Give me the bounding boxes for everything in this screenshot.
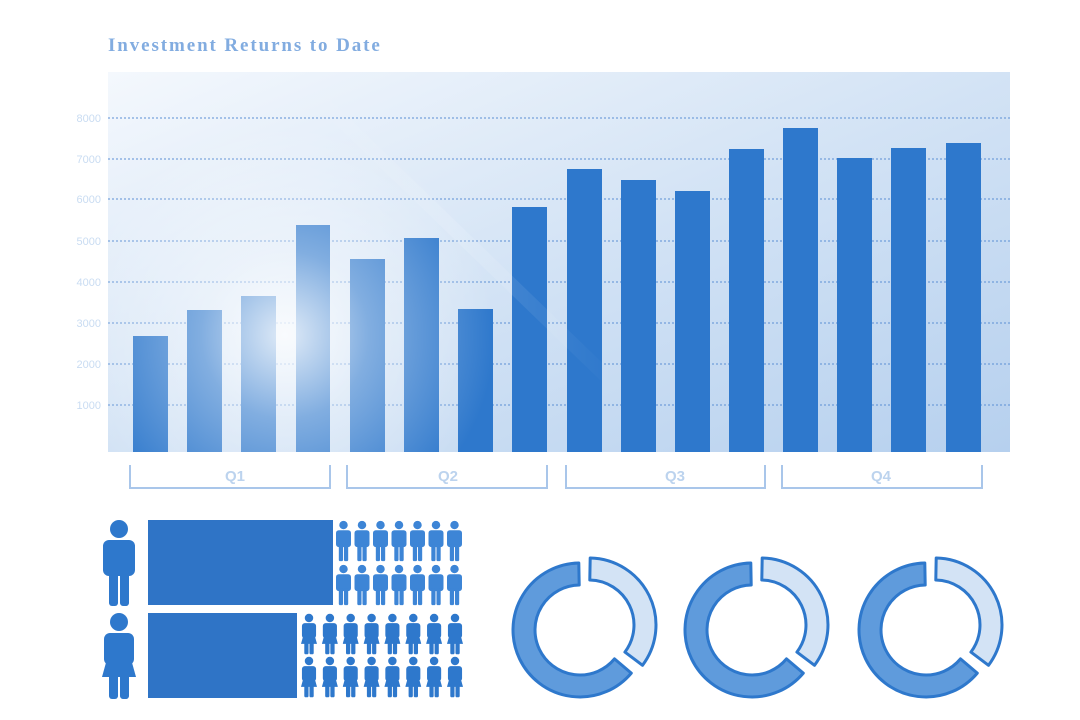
quarter brackets: Q2: [438, 468, 458, 485]
quarter brackets: Q4: [871, 468, 892, 485]
icon: woman: [102, 613, 136, 699]
bar: men: [148, 520, 333, 605]
title: Investment Returns to Date: [108, 35, 382, 56]
bars: [133, 128, 981, 452]
quarter brackets: Q1: [225, 468, 245, 485]
donut 2: [685, 558, 828, 697]
bar: women: [148, 613, 297, 698]
y axis labels: 6000: [77, 194, 101, 206]
y axis labels: 7000: [77, 154, 101, 166]
quarter brackets: Q3: [665, 468, 685, 485]
y axis labels: 1000: [77, 400, 101, 412]
people panel: [102, 520, 463, 699]
small women: [301, 614, 463, 697]
y axis labels: [77, 113, 101, 412]
y axis labels: 2000: [77, 359, 101, 371]
y axis labels: 3000: [77, 318, 101, 330]
y axis labels: 8000: [77, 113, 101, 125]
chart: [77, 72, 1010, 452]
donut 3: [859, 558, 1002, 697]
y axis labels: 4000: [77, 277, 101, 289]
small men: [336, 521, 462, 605]
donut 1: [513, 558, 656, 697]
icon: man: [103, 520, 135, 606]
y axis labels: 5000: [77, 236, 101, 248]
quarter brackets: [130, 465, 982, 488]
